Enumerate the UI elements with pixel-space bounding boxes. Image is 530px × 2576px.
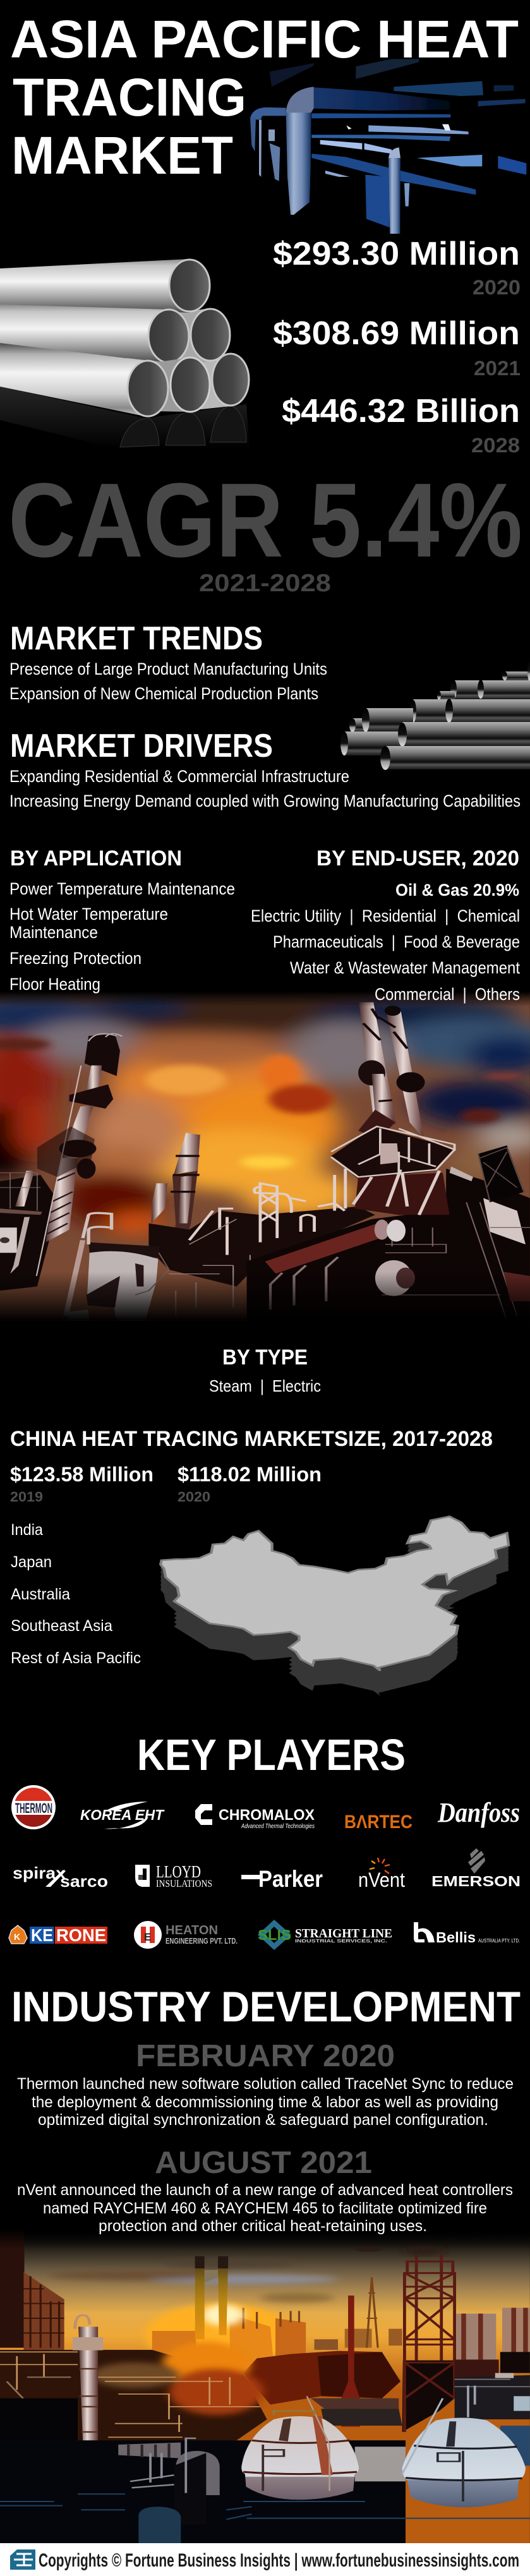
logos [9, 1785, 521, 1950]
logo: Bellis [414, 1922, 520, 1946]
truss tower [478, 1145, 524, 1202]
left tower [37, 1033, 123, 1276]
market size values: $308.69 Million [273, 315, 520, 352]
logo: Spirax Sarco: spirax [13, 1863, 66, 1882]
right mass [247, 1167, 530, 1321]
china market values: $123.58 Million [10, 1463, 154, 1486]
development: February 2020: Thermon launched new software solution called TraceNet Sync to reduce [17, 2075, 514, 2093]
logo: Chromalox: CHROMALOX [219, 1807, 315, 1824]
silos [455, 2308, 530, 2419]
logo: Spirax Sarco: sarco [60, 1872, 108, 1891]
logo: Straight Line: INDUSTRIAL SERVICES, INC. [295, 1939, 387, 1944]
logo: Lloyd Insulations: INSULATIONS [156, 1879, 212, 1889]
market trends: MARKET TRENDS [10, 620, 263, 657]
title: ASIA PACIFIC HEAT [10, 9, 519, 69]
by application: Hot Water Temperature [9, 905, 168, 924]
market size values: $446.32 Billion [282, 393, 520, 430]
logo: Korea EHT: KOREA EHT [80, 1807, 165, 1823]
right chimneys and platform [331, 1002, 455, 1215]
by application: Floor Heating [9, 975, 100, 994]
region list: Southeast Asia [11, 1617, 112, 1635]
logo: Thermon [11, 1785, 56, 1829]
logo: Bellis: Bellis [436, 1929, 476, 1946]
by application: Power Temperature Maintenance [9, 879, 235, 898]
market drivers: MARKET DRIVERS [10, 728, 273, 764]
logo: Heaton Engineering [134, 1921, 238, 1949]
midground plant [0, 2338, 402, 2441]
key players heading: KEY PLAYERS [137, 1730, 406, 1779]
foreground base [0, 2426, 530, 2543]
logo: Danfoss: Danfoss [437, 1797, 520, 1828]
storage sphere left [241, 2396, 359, 2500]
by type: Steam | Electric [209, 1376, 321, 1395]
logo: Straight Line: SLIS [258, 1927, 291, 1943]
logo: Heaton Engineering: HEATON [166, 1923, 218, 1937]
logo: Straight Line: STRAIGHT LINE [295, 1927, 392, 1941]
by application [9, 846, 235, 994]
tank and pipe [66, 1213, 169, 1321]
region list: Japan [11, 1553, 52, 1571]
logo: Bartec: BΛRTEC [344, 1812, 413, 1833]
development: August 2021: named RAYCHEM 460 & RAYCHEM 465 to facilitate optimized fire [43, 2200, 487, 2217]
logo: Lloyd Insulations: LLOYD [156, 1862, 201, 1881]
map: China [160, 1517, 509, 1696]
logo: Emerson: EMERSON [431, 1873, 521, 1889]
market size values: 2021 [474, 357, 521, 380]
footer [0, 2543, 530, 2576]
china market values: 2020 [178, 1489, 210, 1505]
logo: Bellis: AUSTRALIA PTY. LTD. [478, 1938, 520, 1944]
white column [73, 2314, 104, 2441]
development: February 2020: optimized digital synchronization & safeguard panel configuration. [38, 2111, 488, 2129]
CAGR: 2021-2028 [199, 570, 331, 597]
by type: BY TYPE [222, 1345, 308, 1369]
market size values [273, 236, 521, 457]
by type [209, 1345, 321, 1395]
market size values: $293.30 Million [273, 236, 520, 272]
market trends [9, 620, 327, 703]
china market values: $118.02 Million [178, 1463, 322, 1486]
china market size heading: CHINA HEAT TRACING MARKETSIZE, 2017-2028 [10, 1427, 493, 1451]
image: dark steel pipes [340, 661, 530, 770]
logo: nVent: nVent [358, 1869, 405, 1891]
tree mass [243, 2351, 401, 2405]
logo: Lloyd Insulations [135, 1862, 212, 1889]
development: August 2021 [17, 2146, 513, 2235]
logo: Kerone: RONE [56, 1925, 106, 1945]
red chimney [341, 2296, 360, 2427]
title: TRACING [13, 68, 246, 127]
market size values: 2020 [473, 276, 521, 299]
region list: India [11, 1521, 43, 1539]
development: August 2021: nVent announced the launch of a new range of advanced heat controllers [17, 2181, 513, 2199]
logo: Chromalox: Advanced Thermal Technologies [241, 1823, 315, 1830]
development: August 2021: AUGUST 2021 [155, 2146, 372, 2180]
storage sphere right [402, 2386, 526, 2507]
left unit [0, 1171, 59, 1291]
china market values [10, 1463, 322, 1505]
market size values: 2028 [471, 434, 520, 457]
logo: Chromalox [195, 1804, 315, 1830]
mid plant [148, 1169, 375, 1316]
by application: Freezing Protection [9, 949, 142, 968]
region list: Australia [11, 1586, 70, 1603]
twin chimneys [195, 2256, 228, 2339]
logo: Straight Line [258, 1920, 392, 1950]
logo: Emerson [431, 1848, 521, 1889]
by end-user [251, 846, 520, 1004]
logo: Korea EHT [80, 1802, 165, 1829]
logo: Kerone: KE [31, 1925, 53, 1945]
region list: Rest of Asia Pacific [11, 1649, 141, 1667]
sun [202, 2304, 244, 2326]
logo: Thermon: THERMON [15, 1800, 52, 1816]
logo: Kerone: K [14, 1932, 20, 1942]
image: stacked silver pipes [0, 259, 250, 450]
development: February 2020: FEBRUARY 2020 [136, 2039, 395, 2073]
logo: Heaton Engineering: ENGINEERING PVT. LTD. [166, 1936, 238, 1946]
middle tower [152, 1133, 200, 1229]
development: February 2020 [17, 2039, 514, 2129]
market drivers [9, 728, 521, 810]
lattice tower [355, 2246, 455, 2432]
image: refinery and storage spheres at dusk [0, 2230, 530, 2543]
market trends: Presence of Large Product Manufacturing Units [9, 659, 327, 678]
logo: Parker: Parker [258, 1866, 323, 1892]
market drivers: Expanding Residential & Commercial Infrastructure [9, 767, 349, 786]
icon: Fortune Business Insights logo [10, 2549, 35, 2570]
by application: Maintenance [9, 923, 98, 942]
china market values: 2019 [10, 1489, 43, 1505]
by application: BY APPLICATION [10, 846, 182, 870]
pipe bundle and fan [270, 1220, 415, 1309]
title [10, 9, 519, 185]
left lattice [0, 2230, 64, 2350]
by end-user: BY END-USER, 2020 [316, 846, 519, 870]
logo: Kerone [9, 1925, 107, 1945]
logo: Heaton Engineering: E [144, 1931, 151, 1943]
logo: nVent [358, 1858, 405, 1891]
development: August 2021: protection and other critical heat-retaining uses. [99, 2217, 427, 2235]
market trends: Expansion of New Chemical Production Plants [9, 684, 318, 703]
development: February 2020: the deployment & decommissioning time & labor as well as providing [32, 2093, 498, 2111]
distant plant buildings [152, 2277, 402, 2373]
logo: Spirax Sarco [13, 1863, 108, 1891]
title: MARKET [11, 126, 233, 185]
by end-user: Oil & Gas 20.9% [395, 881, 519, 900]
region list [11, 1521, 141, 1667]
image: blue industrial pipes [250, 59, 526, 234]
image: refinery at sunset [0, 987, 530, 1321]
